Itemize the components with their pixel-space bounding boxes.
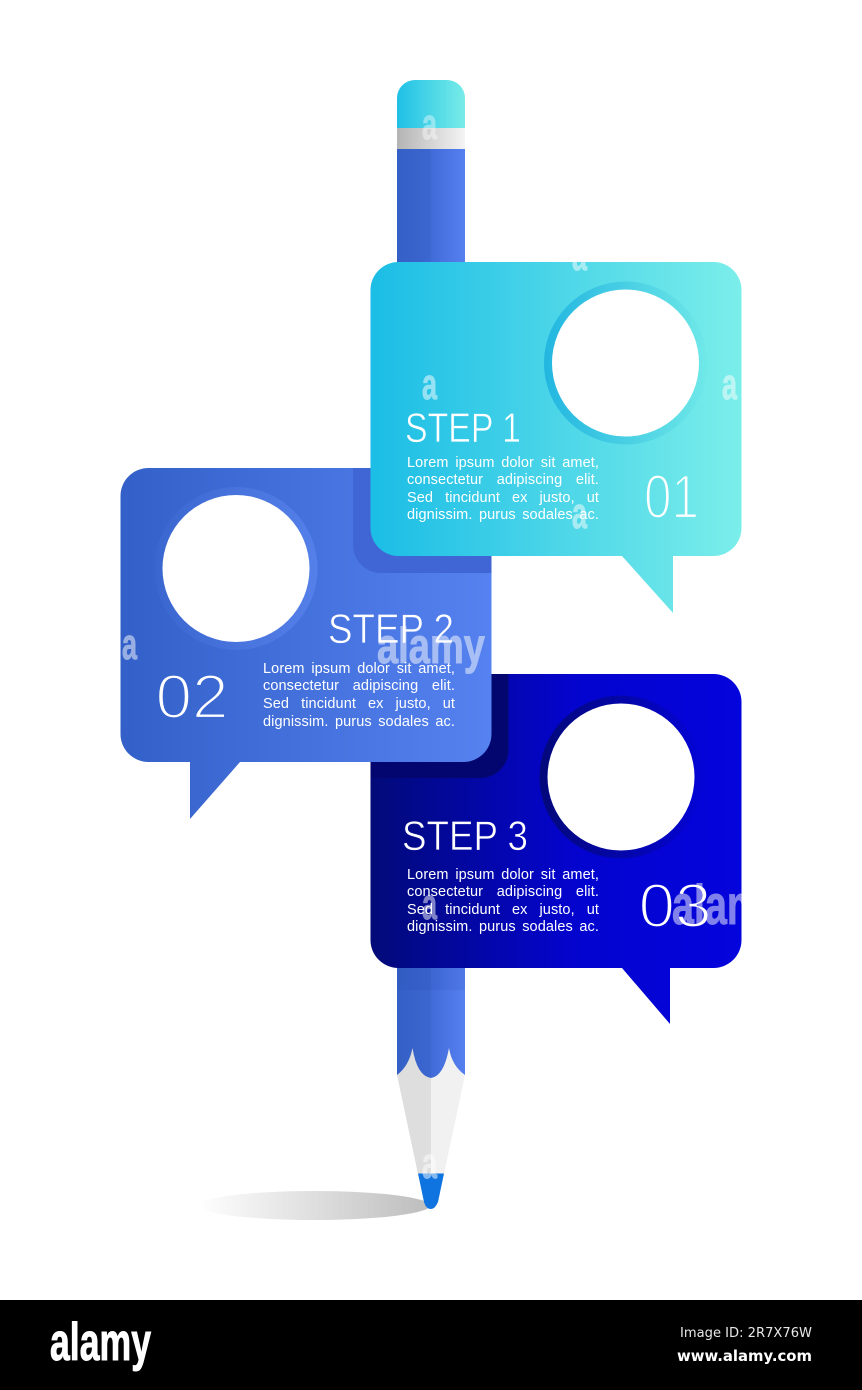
footer bar — [0, 1300, 862, 1390]
wood tip — [397, 1045, 465, 1174]
body text — [407, 455, 599, 523]
panel: step 2 — [120, 468, 492, 819]
upper pencil body — [397, 149, 465, 269]
image id: Image ID: 2R7X76W — [680, 1326, 812, 1341]
body text: Sed tincidunt ex justo, ut — [407, 902, 599, 918]
watermarks: alamy — [672, 873, 784, 936]
number: 02 — [156, 663, 228, 732]
body text: Sed tincidunt ex justo, ut — [407, 490, 599, 506]
image circle — [154, 487, 318, 650]
metal band — [397, 128, 465, 149]
lead point — [418, 1174, 444, 1209]
panel: step 1 — [370, 262, 742, 613]
watermarks: a — [422, 100, 437, 149]
body text: Sed tincidunt ex justo, ut — [263, 696, 455, 712]
heading: STEP 3 — [402, 812, 528, 859]
body text: Lorem ipsum dolor sit amet, — [407, 455, 599, 471]
body text: consectetur adipiscing elit. — [407, 884, 599, 900]
watermarks — [122, 115, 742, 1179]
body text: dignissim. purus sodales ac. — [263, 714, 455, 730]
pencil — [227, 80, 465, 1220]
watermarks: a — [572, 489, 587, 538]
watermarks: alamy — [377, 618, 485, 674]
footer logo: alamy — [50, 1313, 151, 1372]
body text: dignissim. purus sodales ac. — [407, 919, 599, 935]
eraser cap — [397, 80, 465, 128]
heading: STEP 2 — [328, 605, 454, 652]
watermarks: a — [572, 231, 587, 280]
body text: Lorem ipsum dolor sit amet, — [407, 867, 599, 883]
image circle — [544, 282, 707, 444]
scalloped body edge — [397, 1040, 465, 1078]
body text: consectetur adipiscing elit. — [407, 472, 599, 488]
body text: consectetur adipiscing elit. — [263, 678, 455, 694]
panel: step 3 — [370, 674, 742, 1024]
watermarks: a — [122, 620, 137, 669]
speech bubble — [120, 468, 492, 819]
ground shadow — [198, 1191, 430, 1220]
watermarks: a — [422, 1139, 437, 1188]
watermarks: a — [722, 360, 737, 409]
shadow under card — [397, 968, 465, 990]
cast shadow from step 1 — [353, 468, 492, 573]
watermarks: a — [422, 360, 437, 409]
image circle — [540, 696, 702, 858]
lower pencil body — [397, 960, 465, 1050]
speech bubble — [370, 262, 742, 613]
cast shadow from step 2 — [370, 674, 508, 778]
speech bubble — [370, 674, 742, 1024]
website: www.alamy.com — [677, 1347, 812, 1365]
heading: STEP 1 — [405, 404, 521, 451]
number: 01 — [644, 463, 699, 532]
body text: Lorem ipsum dolor sit amet, — [263, 661, 455, 677]
body text — [263, 661, 455, 730]
number: 03 — [638, 872, 712, 941]
body text: dignissim. purus sodales ac. — [407, 507, 599, 523]
body text — [407, 867, 599, 935]
watermarks: a — [422, 880, 437, 929]
